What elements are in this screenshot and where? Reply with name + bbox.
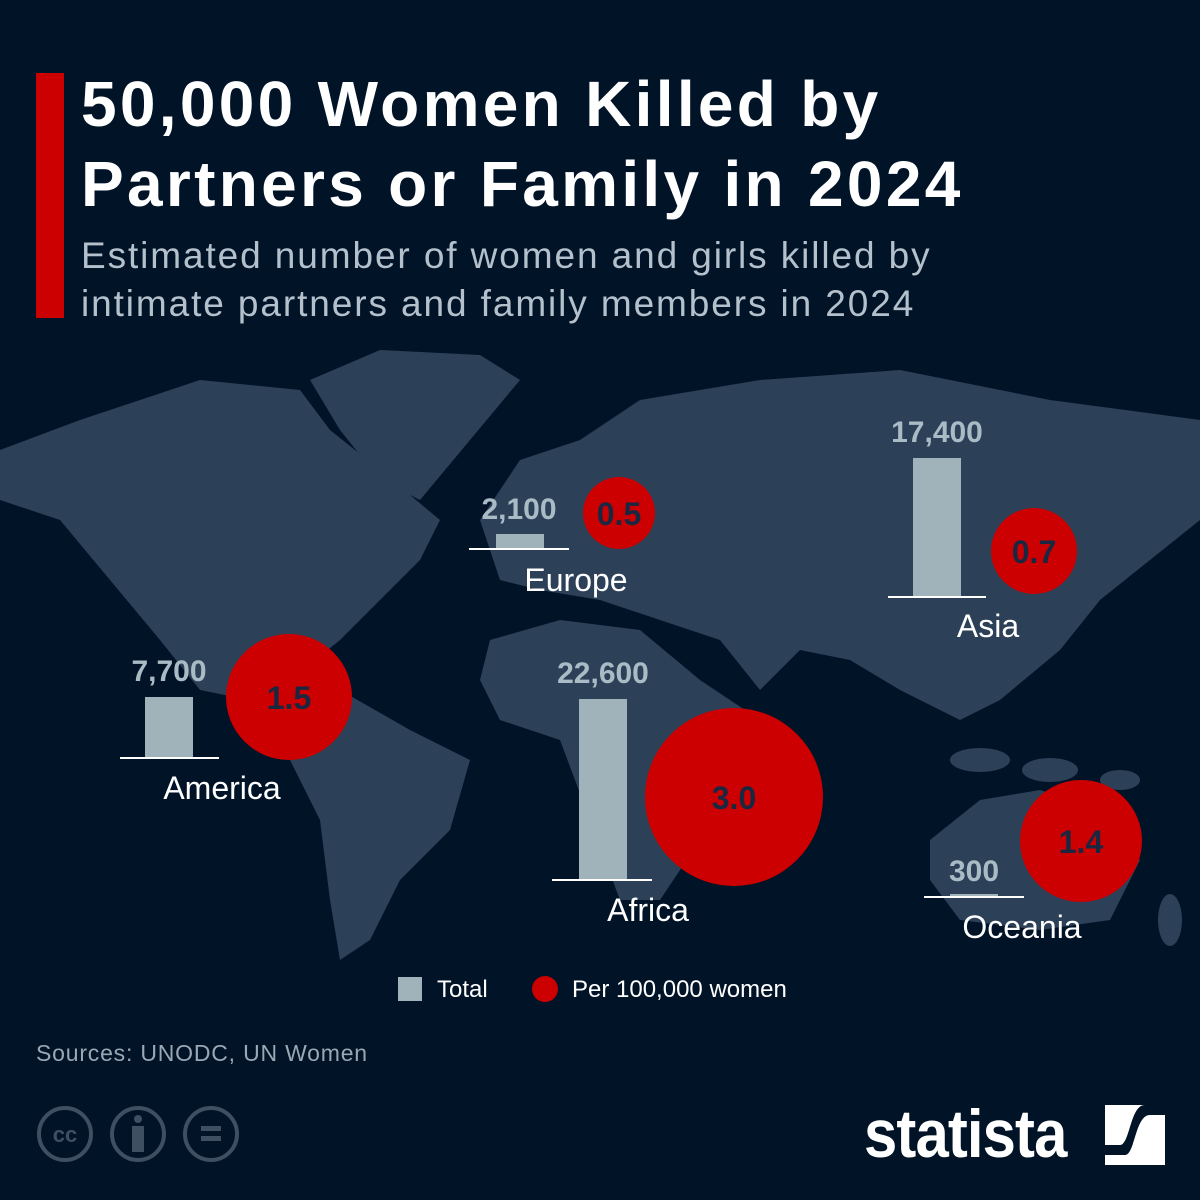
legend <box>398 976 787 1003</box>
legend: Per 100,000 women <box>572 976 787 1003</box>
region: America: America <box>163 770 281 806</box>
region: Asia: Asia <box>957 608 1019 644</box>
region: Oceania <box>924 780 1142 945</box>
logo icon <box>1105 1105 1165 1165</box>
region: Africa: Africa <box>607 892 689 928</box>
source: Sources: UNODC, UN Women <box>36 1040 368 1066</box>
region: Africa: 3.0 <box>712 780 756 816</box>
region: America: 1.5 <box>267 680 311 716</box>
icons: license <box>37 1106 239 1162</box>
region: Asia: 0.7 <box>1012 534 1056 570</box>
title accent bar <box>36 73 64 318</box>
title <box>81 68 964 220</box>
region: America <box>120 634 352 806</box>
region: Asia <box>888 416 1077 644</box>
region: Africa <box>552 657 823 928</box>
region: Oceania: 1.4 <box>1059 824 1103 860</box>
region: Asia: 17,400 <box>891 416 983 449</box>
region: Europe: 2,100 <box>481 493 557 526</box>
title: Partners or Family in 2024 <box>81 148 964 220</box>
region: Europe: 0.5 <box>597 496 641 532</box>
region: America: 7,700 <box>131 655 207 688</box>
title: 50,000 Women Killed by <box>81 68 882 140</box>
region: Europe <box>469 477 655 598</box>
icons: license: cc <box>53 1122 77 1147</box>
logo: statista: statista <box>864 1096 1066 1172</box>
subtitle: intimate partners and family members in 2024 <box>81 283 915 324</box>
region: Oceania: Oceania <box>962 909 1082 945</box>
world map <box>0 350 1200 960</box>
legend: Total <box>437 976 488 1003</box>
subtitle <box>81 235 932 324</box>
region: Europe: Europe <box>524 562 628 598</box>
region: Africa: 22,600 <box>557 657 649 690</box>
subtitle: Estimated number of women and girls killed by <box>81 235 932 276</box>
region: Oceania: 300 <box>949 855 999 888</box>
